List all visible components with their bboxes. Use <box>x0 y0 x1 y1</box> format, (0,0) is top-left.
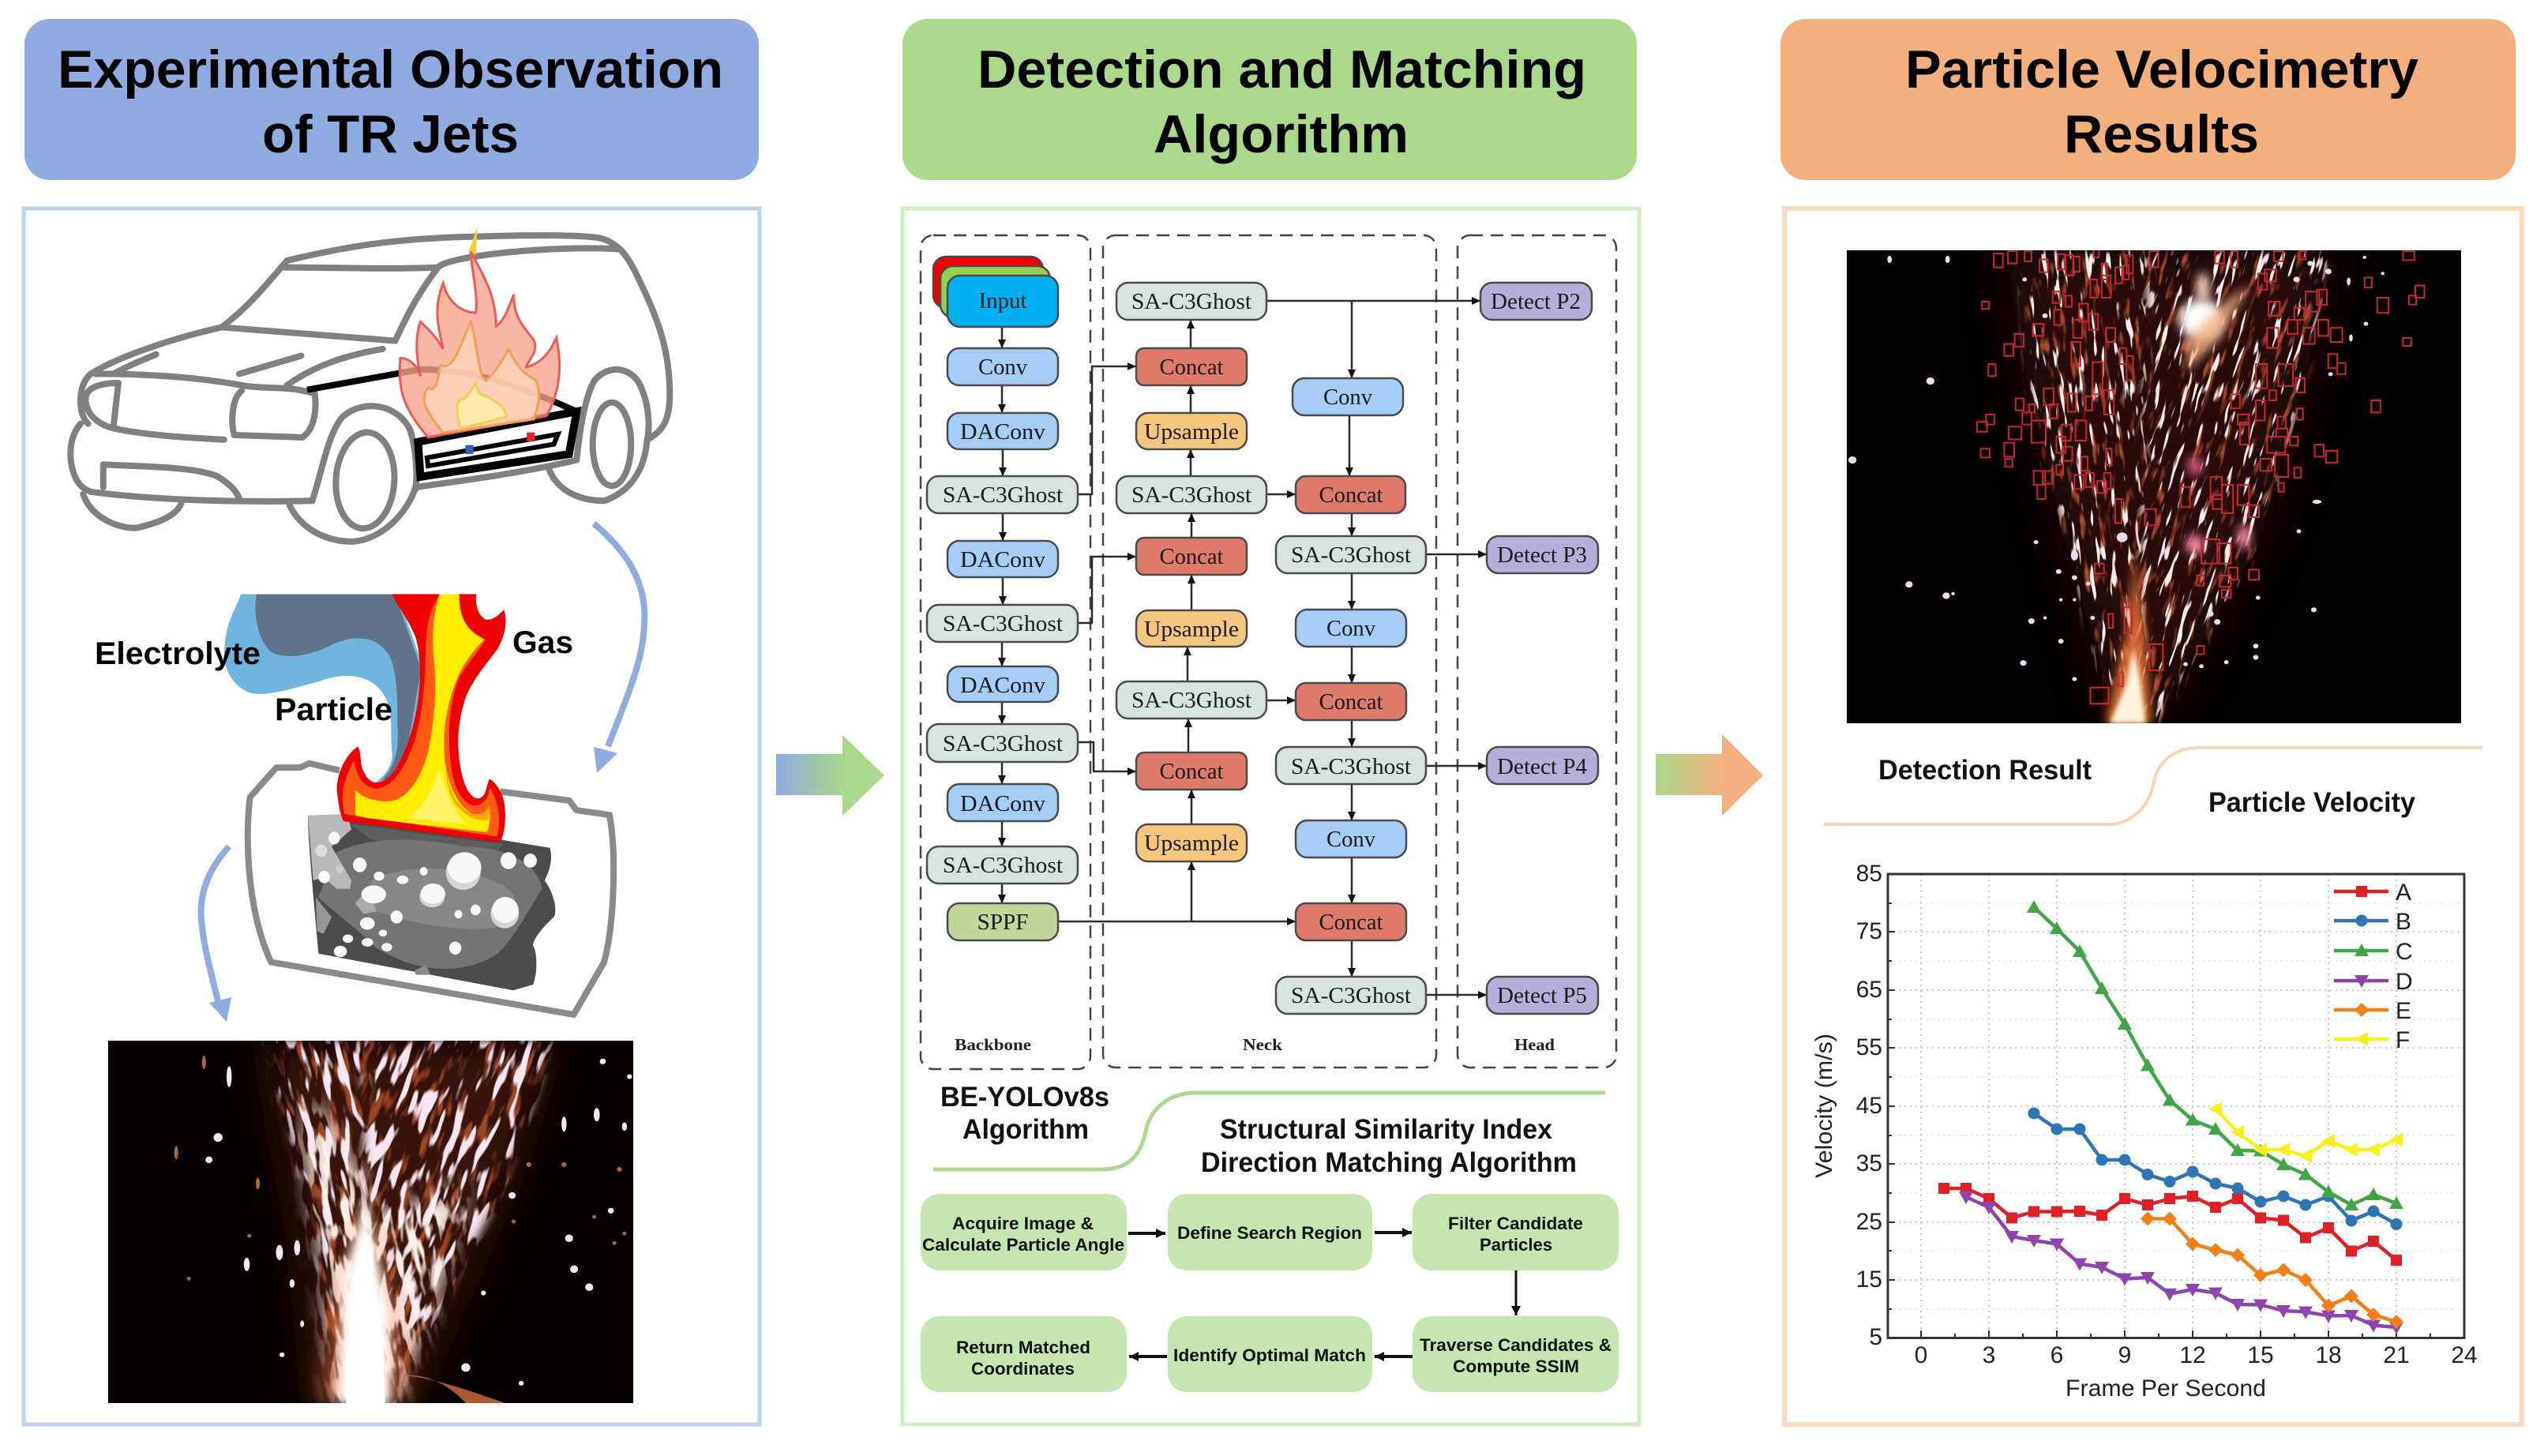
block: SA-C3Ghost: SA-C3Ghost <box>1291 542 1411 568</box>
block: SA-C3Ghost: SA-C3Ghost <box>1131 482 1251 508</box>
block: Concat <box>1136 752 1247 790</box>
block: DAConv: DAConv <box>960 547 1046 572</box>
label: Particle Velocity: Particle Velocity <box>2208 787 2416 818</box>
header: Experimental Observation of TR Jets <box>24 19 759 180</box>
header: Detection and Matching Algorithm: Algorithm <box>1154 104 1409 164</box>
container: Neck <box>1103 235 1436 1068</box>
block: Upsample <box>1136 610 1247 647</box>
label: Detection Result: Detection Result <box>1878 755 2092 786</box>
y axis labels: 65 <box>1856 977 1882 1003</box>
heading: Structural Similarity Index Direction Matching Algorithm <box>1201 1114 1577 1178</box>
panel: detection and matching algorithm <box>902 208 1639 1424</box>
block: Conv: Conv <box>978 355 1027 380</box>
block: Conv: Conv <box>1326 827 1375 852</box>
series A <box>1944 1188 2396 1260</box>
legend <box>2334 880 2413 1053</box>
x axis labels: 24 <box>2451 1342 2478 1368</box>
header: Particle Velocimetry Results: Particle Velocimetry <box>1905 39 2418 99</box>
block: SA-C3Ghost <box>1276 977 1426 1014</box>
illustration: flame jet <box>337 594 506 842</box>
step: Return Matched Coordinates <box>921 1316 1127 1392</box>
block: Detect P5 <box>1487 977 1598 1014</box>
block: Concat <box>1296 476 1405 513</box>
arrow: car to cell <box>594 523 644 773</box>
network connections <box>1002 301 1487 995</box>
label: Gas: Gas <box>512 625 573 660</box>
y axis labels: 55 <box>1856 1034 1882 1060</box>
header: Particle Velocimetry Results: Results <box>2064 104 2259 164</box>
block: Conv: Conv <box>1326 616 1375 641</box>
step: Return Matched Coordinates: Return Matched <box>956 1338 1090 1357</box>
chart grid <box>1888 874 2464 1338</box>
heading: Structural Similarity Index Direction Matching Algorithm: Structural Similarity Index <box>1220 1114 1553 1145</box>
x axis labels: 21 <box>2383 1342 2410 1368</box>
block: Upsample: Upsample <box>1144 617 1239 642</box>
header: Experimental Observation of TR Jets: Experimental Observation <box>58 39 723 99</box>
y axis labels <box>1856 861 1882 1350</box>
flow arrows <box>1128 1233 1516 1357</box>
block: Detect P4: Detect P4 <box>1497 754 1587 779</box>
legend: E <box>2396 998 2411 1024</box>
arrow: observation to algorithm <box>776 735 884 816</box>
block: DAConv <box>947 413 1058 449</box>
block: SA-C3Ghost <box>927 724 1078 762</box>
y axis title: Velocity (m/s) <box>1811 1034 1837 1178</box>
step: Identify Optimal Match: Identify Optimal Match <box>1173 1345 1366 1365</box>
series C <box>2034 907 2396 1205</box>
y axis labels: 45 <box>1856 1093 1882 1119</box>
y axis labels: 5 <box>1869 1324 1882 1350</box>
step: Define Search Region: Define Search Region <box>1177 1223 1362 1243</box>
block: DAConv <box>947 784 1058 821</box>
block: Concat: Concat <box>1319 910 1383 935</box>
block: Upsample <box>1136 413 1247 449</box>
block: Input: Input <box>979 288 1026 313</box>
line chart: velocity vs frame per second <box>1811 861 2478 1402</box>
block: SA-C3Ghost <box>927 846 1078 884</box>
heading: BE-YOLOv8s Algorithm <box>940 1082 1109 1145</box>
block: Concat <box>1136 538 1247 575</box>
x axis labels: 9 <box>2118 1342 2131 1368</box>
step: Define Search Region <box>1168 1194 1372 1270</box>
legend: F <box>2396 1027 2410 1053</box>
y axis labels: 15 <box>1856 1266 1882 1293</box>
block: Upsample: Upsample <box>1144 419 1239 445</box>
series D <box>1966 1197 2396 1327</box>
block: Conv: Conv <box>1323 385 1372 410</box>
x axis labels: 18 <box>2315 1342 2342 1368</box>
photo: detection result with red boxes <box>1847 250 2461 723</box>
block: SA-C3Ghost <box>927 476 1078 513</box>
x axis title: Frame Per Second <box>2066 1375 2266 1402</box>
block: Detect P4 <box>1487 747 1598 784</box>
legend: A <box>2396 880 2411 906</box>
header: Experimental Observation of TR Jets: of TR Jets <box>262 104 519 164</box>
block: Conv <box>1296 820 1406 857</box>
x axis labels: 0 <box>1915 1342 1927 1368</box>
x axis labels: 15 <box>2247 1342 2274 1368</box>
heading: Structural Similarity Index Direction Matching Algorithm: Direction Matching Algorithm <box>1201 1147 1577 1178</box>
step: Return Matched Coordinates: Coordinates <box>971 1359 1075 1379</box>
container: Neck: Neck <box>1243 1035 1282 1054</box>
arrow: algorithm to results <box>1656 734 1763 816</box>
block: Concat: Concat <box>1159 759 1224 784</box>
block: Conv <box>947 348 1058 385</box>
block: SA-C3Ghost: SA-C3Ghost <box>943 731 1063 756</box>
block: SA-C3Ghost: SA-C3Ghost <box>1291 983 1411 1008</box>
heading: BE-YOLOv8s Algorithm: BE-YOLOv8s <box>940 1082 1109 1113</box>
step: Filter Candidate Particles <box>1413 1194 1619 1270</box>
step: Traverse Candidates and Compute SSIM: Compute SSIM <box>1453 1357 1579 1376</box>
block: Conv <box>1293 378 1403 415</box>
divider curve: orange <box>1824 748 2482 824</box>
block: SPPF: SPPF <box>977 910 1028 935</box>
block: Detect P3: Detect P3 <box>1497 542 1587 568</box>
label: Particle: Particle <box>275 692 392 727</box>
step: Acquire Image and Calculate Particle Angle <box>921 1194 1127 1270</box>
block: SPPF <box>947 903 1058 940</box>
header: Particle Velocimetry Results <box>1780 19 2516 180</box>
block: Concat: Concat <box>1159 544 1224 569</box>
block: Concat: Concat <box>1319 482 1383 508</box>
block: Upsample <box>1136 824 1247 861</box>
container: Backbone <box>921 235 1090 1069</box>
block: SA-C3Ghost: SA-C3Ghost <box>1291 754 1411 779</box>
block: SA-C3Ghost <box>1276 536 1426 573</box>
legend: B <box>2396 909 2411 935</box>
heading: BE-YOLOv8s Algorithm: Algorithm <box>962 1114 1089 1145</box>
block: Conv <box>1296 610 1406 647</box>
panel: particle velocimetry results <box>1782 206 2524 1427</box>
x axis labels <box>1915 1342 2478 1368</box>
legend: D <box>2396 969 2413 995</box>
block: SA-C3Ghost: SA-C3Ghost <box>943 611 1063 636</box>
y axis labels: 25 <box>1856 1209 1882 1235</box>
panel: experimental observation <box>22 207 761 1426</box>
block: Upsample: Upsample <box>1144 831 1239 856</box>
series B <box>2034 1113 2396 1224</box>
block: Detect P2 <box>1480 283 1592 320</box>
x axis labels: 3 <box>1983 1342 1995 1368</box>
chart frame and ticks <box>1888 874 2464 1338</box>
block: DAConv: DAConv <box>960 791 1046 816</box>
block: Detect P2: Detect P2 <box>1491 289 1581 314</box>
block: SA-C3Ghost: SA-C3Ghost <box>943 853 1063 878</box>
step: Filter Candidate Particles: Particles <box>1480 1235 1552 1255</box>
header: Detection and Matching Algorithm: Detection and Matching <box>977 39 1586 99</box>
divider curve: green <box>933 1093 1605 1169</box>
icon: battery cell outline <box>248 764 613 1015</box>
icon: porous rock in cell <box>308 814 555 990</box>
container: Head: Head <box>1514 1035 1555 1054</box>
block: DAConv <box>947 541 1058 577</box>
legend: C <box>2396 939 2413 965</box>
block: Concat: Concat <box>1159 355 1224 380</box>
step: Traverse Candidates and Compute SSIM <box>1413 1316 1619 1392</box>
block: SA-C3Ghost <box>1276 747 1426 784</box>
x axis labels: 12 <box>2179 1342 2206 1368</box>
icon: car with battery fire <box>70 227 670 542</box>
block: SA-C3Ghost <box>1116 681 1266 719</box>
step: Acquire Image and Calculate Particle Angle: Calculate Particle Angle <box>922 1235 1124 1255</box>
step: Identify Optimal Match <box>1168 1316 1372 1392</box>
block: Input <box>933 257 1058 327</box>
y axis labels: 35 <box>1856 1150 1882 1176</box>
series F <box>2216 1109 2396 1156</box>
label: Electrolyte: Electrolyte <box>95 636 261 671</box>
block: SA-C3Ghost <box>1116 476 1266 513</box>
header: Detection and Matching Algorithm <box>902 19 1637 180</box>
illustration: electrolyte and particle jet <box>224 594 424 787</box>
block: SA-C3Ghost <box>927 605 1078 642</box>
container: Head <box>1458 235 1616 1068</box>
y axis labels: 85 <box>1856 861 1882 887</box>
block: SA-C3Ghost: SA-C3Ghost <box>1131 688 1251 713</box>
block: SA-C3Ghost: SA-C3Ghost <box>943 482 1063 508</box>
step: Filter Candidate Particles: Filter Candidate <box>1448 1214 1583 1233</box>
step: Acquire Image and Calculate Particle Angle: Acquire Image & <box>952 1214 1094 1233</box>
block: Concat: Concat <box>1319 689 1383 715</box>
block: SA-C3Ghost: SA-C3Ghost <box>1131 289 1251 314</box>
block: Detect P5: Detect P5 <box>1497 983 1587 1008</box>
block: DAConv: DAConv <box>960 419 1046 445</box>
step: Traverse Candidates and Compute SSIM: Traverse Candidates & <box>1420 1335 1612 1355</box>
block: DAConv <box>947 666 1058 702</box>
block: Detect P3 <box>1487 536 1598 573</box>
block: DAConv: DAConv <box>960 673 1046 698</box>
series E <box>2148 1219 2396 1322</box>
container: Backbone: Backbone <box>955 1035 1031 1054</box>
x axis labels: 6 <box>2051 1342 2063 1368</box>
photo: particle jet <box>108 1041 633 1403</box>
block: Concat <box>1296 683 1406 720</box>
block: Concat <box>1136 348 1247 385</box>
block: Concat <box>1296 903 1406 940</box>
block: SA-C3Ghost <box>1116 283 1266 320</box>
y axis labels: 75 <box>1856 918 1882 944</box>
arrow: cell to photo <box>201 846 231 1022</box>
